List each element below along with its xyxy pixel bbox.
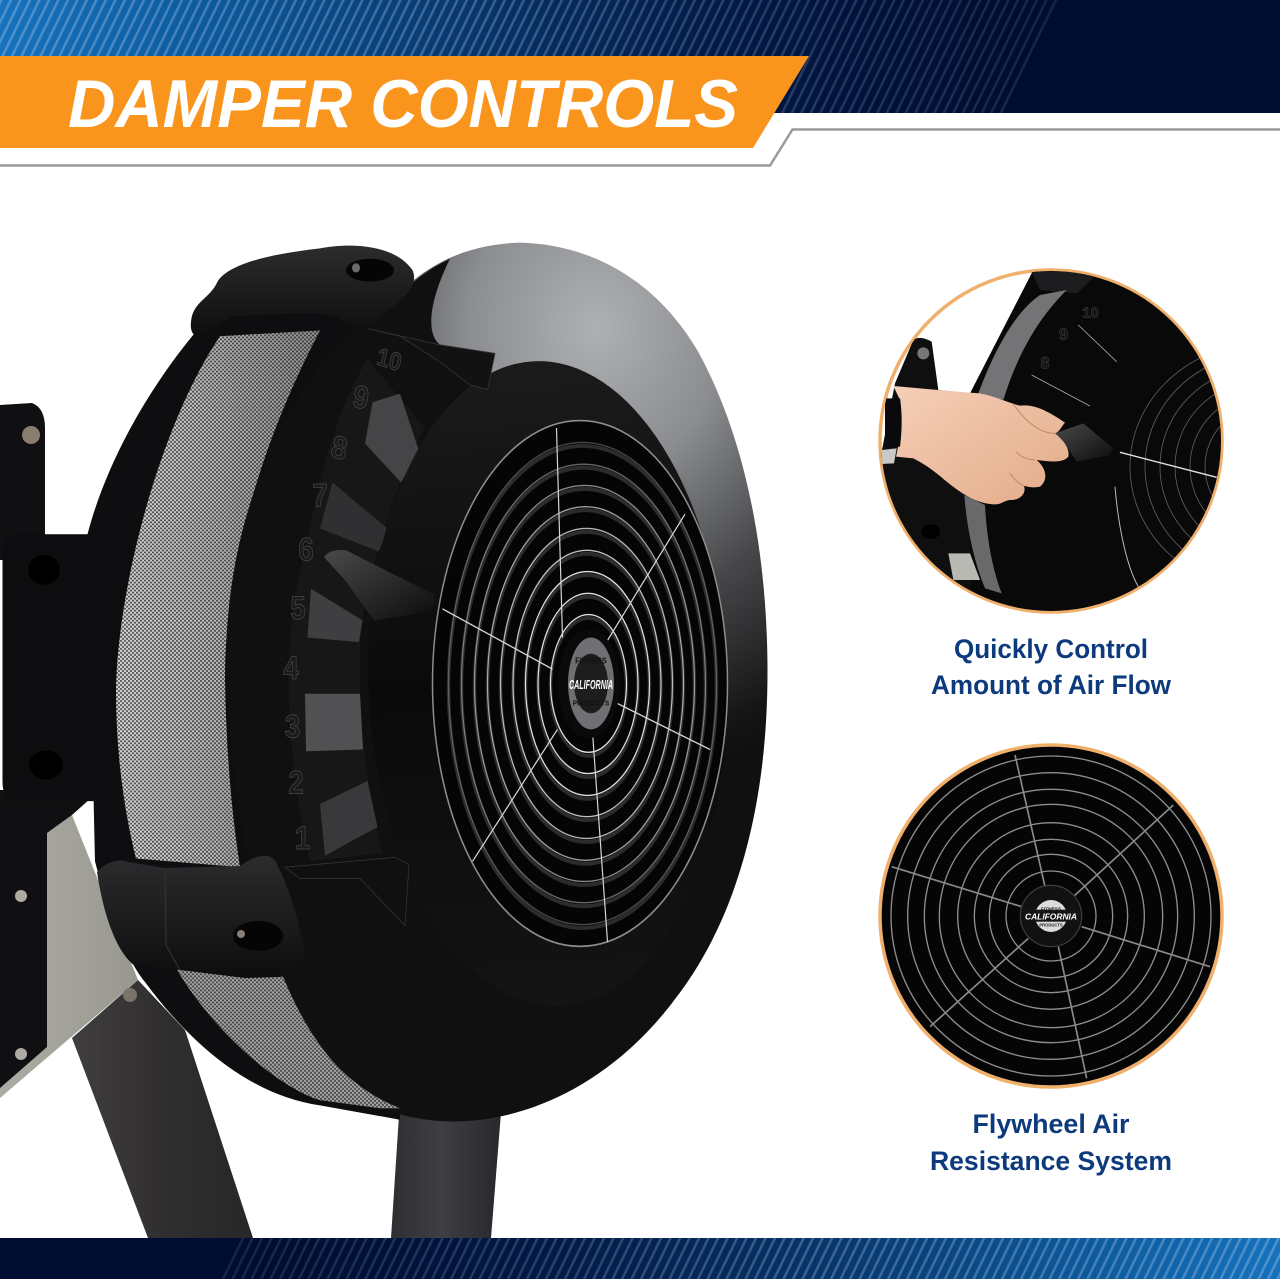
upper shroud hook: [368, 329, 495, 390]
scale numbers: 10: [374, 344, 404, 378]
circle photo: hand adjusting damper: [878, 268, 1224, 614]
scale numbers: 9: [350, 379, 372, 417]
main image: flywheel: [2, 243, 768, 1121]
caption: quickly control: Quickly Control: [954, 634, 1148, 664]
circle photo: hand adjusting damper: 9: [1059, 325, 1068, 344]
grille in circle: [1130, 358, 1220, 558]
centre hub logo: PRODUCTS: [573, 700, 610, 707]
front dish: [354, 351, 741, 1016]
caption: quickly control: [931, 634, 1172, 700]
scale numbers: 7: [312, 479, 328, 514]
lower shroud hook: [285, 857, 409, 926]
scale numbers: 1: [295, 821, 310, 856]
scale numbers: [283, 344, 404, 856]
scale numbers: 3: [285, 710, 300, 745]
damper scale sector: [283, 344, 425, 861]
lever in circle: [1055, 423, 1113, 462]
centre hub logo: FITNESS: [575, 656, 607, 666]
caption: flywheel air resistance: Flywheel Air: [972, 1109, 1130, 1139]
grille spokes: [442, 428, 710, 942]
caption: quickly control: Amount of Air Flow: [931, 670, 1172, 700]
mesh strip in circle: [978, 290, 1067, 400]
flywheel rear housing: [88, 305, 400, 1120]
shell lip: [226, 259, 500, 1121]
scale numbers: 5: [290, 591, 306, 627]
bottom clamp: [97, 856, 304, 978]
circle photo: flywheel grille: [880, 745, 1222, 1087]
machine body in circle: [970, 270, 1237, 613]
damper lever: [324, 550, 435, 620]
fan grille: [432, 421, 728, 946]
centre logo: PRODUCTS: [1039, 922, 1063, 927]
circle photo: hand adjusting damper: 10: [1083, 305, 1099, 321]
scale numbers: 4: [283, 651, 299, 686]
scale numbers: 6: [298, 533, 314, 568]
header outline stroke: [0, 130, 1280, 166]
perforated mesh band upper: [116, 330, 320, 867]
title: DAMPER CONTROLS: [68, 66, 738, 142]
centre logo: [1020, 885, 1082, 947]
orange title banner: [0, 56, 809, 148]
centre hub logo: CALIFORNIA: [569, 677, 613, 692]
perforated mesh band lower: [177, 970, 400, 1108]
hand: [893, 386, 1069, 504]
centre logo: CALIFORNIA: [1025, 911, 1077, 921]
circle photo: hand adjusting damper: 8: [1040, 353, 1050, 372]
footer band: [0, 1238, 1280, 1279]
smartwatch: [885, 398, 902, 448]
header band: [0, 0, 1280, 113]
mounting bracket: [2, 534, 131, 801]
rear frame and legs: [0, 403, 502, 1238]
outer shell: [226, 243, 767, 1121]
top clamp: [191, 246, 414, 338]
scale numbers: 2: [288, 766, 304, 801]
grille rings: [891, 756, 1211, 1076]
caption: flywheel air resistance: Resistance System: [930, 1146, 1172, 1176]
damper dial in circle: [1032, 325, 1117, 406]
centre hub logo: [558, 629, 620, 738]
scale numbers: 8: [329, 429, 350, 468]
caption: flywheel air resistance: [930, 1109, 1172, 1176]
grille spokes: [892, 755, 1210, 1078]
centre logo: FITNESS: [1041, 906, 1061, 911]
